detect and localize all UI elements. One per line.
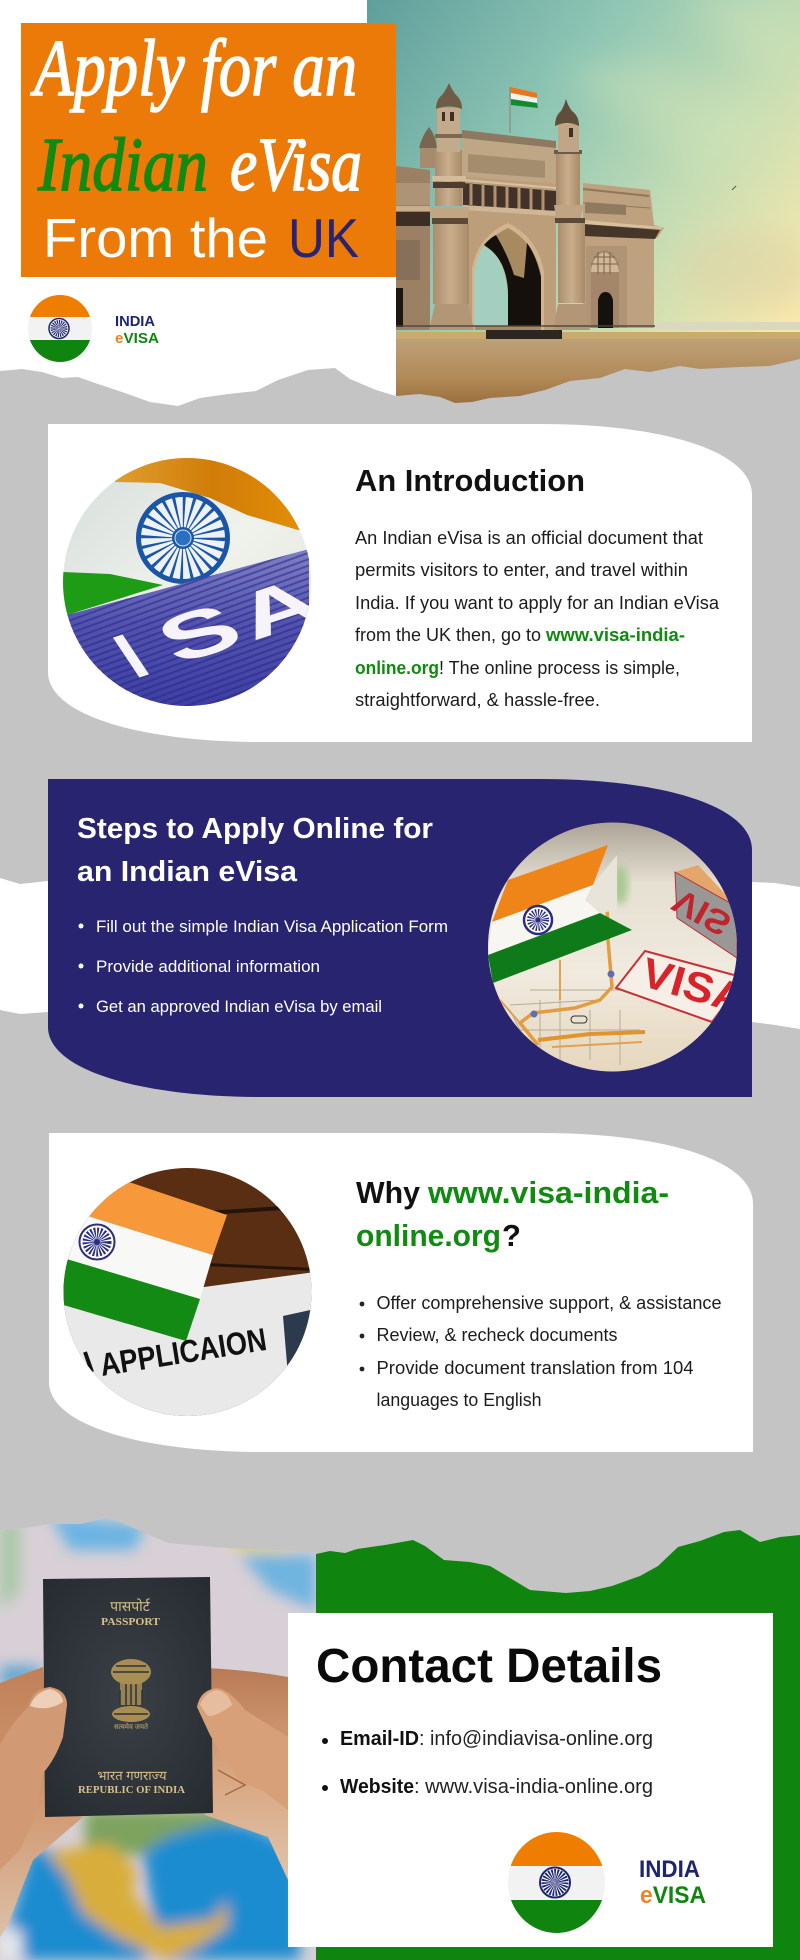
passport: पासपोर्ट [110, 1598, 151, 1614]
ground [396, 336, 800, 420]
header photo: Gateway of India [367, 0, 800, 420]
chakra [138, 494, 228, 582]
visa letters: S [142, 589, 256, 677]
heading: why: Why [356, 1175, 421, 1210]
footer green torn panel [316, 1530, 800, 1960]
attic [462, 130, 556, 184]
image: flag and visa stamps circle: VIS [666, 881, 737, 943]
right pillar [556, 150, 580, 205]
header white panel [0, 0, 396, 420]
hands behind passport [0, 1667, 288, 1937]
flag [510, 87, 538, 133]
panel: why [49, 1133, 753, 1452]
image: flag and visa stamps circle: VISA [637, 948, 751, 1023]
title line: From the UK: UK [288, 207, 359, 269]
emblem [111, 1659, 151, 1722]
contact list: Email-ID [340, 1728, 419, 1750]
paragraph: ! The online process is simple, [439, 657, 680, 678]
logo: India eVisa small [26, 293, 160, 364]
image: flag and visa stamps circle [485, 820, 751, 1075]
image: application form and flag circle [60, 1165, 315, 1420]
title line: Indian eVisa: eVisa [230, 123, 362, 207]
arch sky [474, 246, 508, 326]
left thumb [0, 1687, 67, 1870]
reasons list: Provide document translation from 104 [376, 1357, 694, 1378]
small left tower [420, 148, 436, 168]
left tower drum [437, 108, 460, 152]
heading: why: www.visa-india- [427, 1175, 669, 1210]
right wing [583, 183, 664, 328]
paragraph: permits visitors to enter, and travel within [355, 559, 688, 580]
logo: India eVisa large [505, 1830, 706, 1936]
title panel [21, 23, 396, 277]
paragraph: India. If you want to apply for an Indian eVisa [355, 592, 720, 613]
base wall [396, 332, 800, 339]
heading: why: online.org [356, 1218, 501, 1253]
paragraph: online.org [355, 657, 439, 678]
arch dark [484, 235, 541, 326]
image: application form and flag circle: APPLICAION [97, 1321, 269, 1383]
title line: Indian eVisa [37, 123, 362, 207]
passport: PASSPORT [101, 1617, 160, 1628]
visa letters: I [100, 621, 162, 691]
arch frame [472, 223, 544, 330]
paragraph: from the UK then, go to [355, 624, 541, 645]
paragraph [355, 527, 720, 710]
contact list: : www.visa-india-online.org [414, 1776, 653, 1798]
paragraph: www.visa-india- [545, 624, 685, 645]
heading: steps [77, 813, 433, 888]
logo: India eVisa small: eVISA [115, 331, 160, 347]
reasons list: languages to English [376, 1389, 542, 1410]
image: flag and visa circle [63, 458, 311, 706]
sky [367, 0, 800, 345]
left wing [396, 166, 430, 330]
step list: Fill out the simple Indian Visa Application Form [96, 917, 448, 936]
right thumb [197, 1688, 288, 1810]
footer photo: passport on a map [0, 1510, 316, 1960]
right tower drum [558, 124, 579, 152]
monument [396, 83, 800, 339]
arch vault [475, 228, 541, 330]
gallery [463, 183, 556, 211]
passport [43, 1577, 213, 1817]
heading: steps: Steps to Apply Online for [77, 813, 433, 845]
title line: From the UK: From the [43, 207, 268, 269]
paragraph: straightforward, & hassle-free. [355, 689, 600, 710]
panel: steps [48, 779, 752, 1097]
panel: contact details [288, 1613, 773, 1947]
left tower cupola [436, 83, 462, 109]
bird [732, 186, 736, 190]
torn white band behind steps panel [0, 878, 800, 1029]
paragraph: An Indian eVisa is an official document that [355, 527, 703, 548]
heading: why [356, 1175, 669, 1253]
step list [78, 917, 448, 1016]
passport: REPUBLIC OF INDIA [78, 1785, 185, 1796]
contact list: : info@indiavisa-online.org [419, 1728, 653, 1750]
central body [462, 176, 556, 330]
contact list: Website [340, 1776, 414, 1798]
logo: India eVisa large: INDIA [639, 1856, 700, 1883]
right tower cupola [555, 99, 579, 126]
visa letters: A [218, 563, 338, 653]
reasons list: Offer comprehensive support, & assistance [376, 1292, 722, 1313]
title line: From the UK [43, 207, 359, 269]
passport: भारत गणराज्य [97, 1768, 167, 1783]
step list: Provide additional information [96, 957, 320, 976]
title line: Indian eVisa: Indian [37, 123, 208, 207]
reasons list [360, 1292, 722, 1410]
heading: steps: an Indian eVisa [77, 856, 298, 888]
heading: Contact Details: Contact Details [316, 1640, 662, 1693]
step list: Get an approved Indian eVisa by email [96, 997, 382, 1016]
logo: India eVisa large: eVISA [640, 1882, 706, 1909]
heading: why: ? [502, 1218, 521, 1253]
reasons list: Review, & recheck documents [376, 1324, 618, 1345]
heading: An Introduction: An Introduction [355, 463, 585, 498]
blurred map [0, 1510, 316, 1960]
passport: सत्यमेव जयते [114, 1722, 149, 1731]
left pillar [435, 150, 462, 206]
contact list [322, 1728, 653, 1798]
logo: India eVisa small: INDIA [115, 314, 156, 330]
title line: Apply for an: Apply for an [30, 25, 357, 113]
visa letters [113, 585, 308, 678]
panel: introduction [48, 424, 752, 742]
